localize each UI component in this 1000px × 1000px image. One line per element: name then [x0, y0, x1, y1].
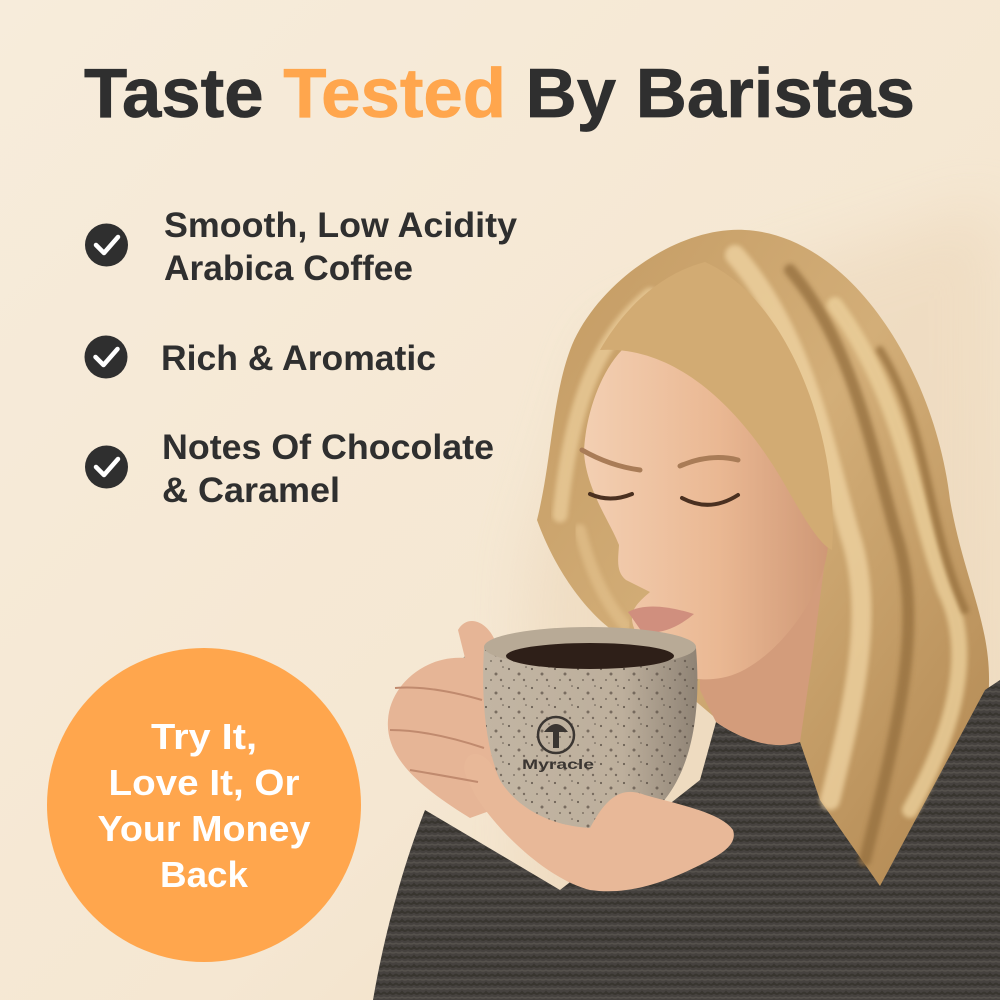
logo	[538, 717, 574, 753]
guarantee badge	[47, 648, 361, 962]
icon: check badge	[84, 336, 128, 378]
mug	[483, 627, 697, 830]
hair back	[537, 230, 989, 886]
neck	[700, 560, 825, 745]
guarantee text: Your Money	[98, 808, 310, 849]
guarantee text: Back	[160, 854, 249, 895]
benefit: notes of chocolate and caramel	[85, 428, 494, 510]
brand name: Myracle	[522, 756, 594, 772]
illustration: woman sipping coffee	[373, 200, 1000, 1000]
icon: check badge	[85, 224, 128, 266]
sweater	[373, 680, 1000, 1000]
title: Taste Tested By Baristas	[84, 54, 915, 132]
benefit list	[84, 206, 518, 510]
icon: check badge	[85, 446, 128, 488]
closed eyes	[590, 494, 738, 505]
lips	[628, 606, 694, 633]
guarantee text: Try It,	[151, 716, 257, 757]
face	[584, 350, 828, 679]
benefit: low acidity	[85, 206, 518, 288]
near hand	[464, 754, 734, 891]
text: notes of chocolate and caramel: & Caramel	[162, 471, 340, 510]
fingers	[390, 688, 484, 782]
text: smooth low acidity arabica coffee: Smooth, Low Acidity	[164, 206, 518, 245]
text: rich and aromatic: Rich & Aromatic	[161, 339, 436, 378]
text: notes of chocolate and caramel: Notes Of Chocolate	[162, 428, 494, 467]
text: smooth low acidity arabica coffee: Arabica Coffee	[164, 249, 413, 288]
guarantee text: Love It, Or	[108, 762, 300, 803]
eyebrows	[582, 450, 738, 470]
benefit: rich and aromatic	[84, 336, 436, 378]
hair strands	[560, 255, 965, 860]
hair front sweep	[600, 262, 833, 550]
soft wall shadow	[520, 200, 1000, 1000]
mug handle	[464, 654, 492, 678]
far hand	[388, 621, 520, 818]
